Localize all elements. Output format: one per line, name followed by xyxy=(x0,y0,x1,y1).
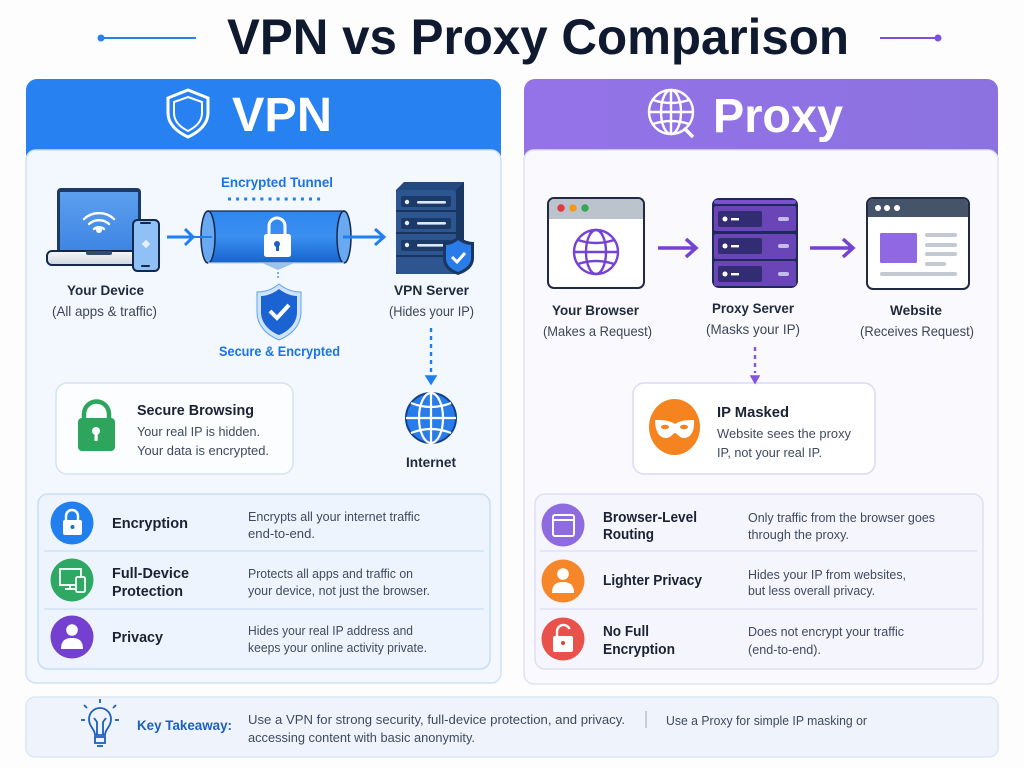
row: no full encryption xyxy=(603,623,904,658)
label: your browser: Your Browser xyxy=(552,302,640,318)
row: privacy: Hides your real IP address and xyxy=(248,623,413,638)
Proxy heading: Proxy xyxy=(713,90,843,143)
row: privacy: keeps your online activity private. xyxy=(248,640,427,655)
row: lighter privacy: Lighter Privacy xyxy=(603,572,703,589)
label: VPN server xyxy=(389,282,474,319)
icon: privacy xyxy=(50,616,94,658)
label: VPN server: VPN Server xyxy=(394,282,470,298)
features: Proxy xyxy=(535,494,983,669)
row: browser-level routing: through the proxy. xyxy=(748,527,849,542)
label: internet: Internet xyxy=(406,454,456,470)
row: lighter privacy: Hides your IP from websites, xyxy=(748,567,906,582)
VPN body xyxy=(26,150,501,683)
callout: secure browsing xyxy=(56,383,293,474)
icon: laptop xyxy=(47,188,141,265)
row: lighter privacy: but less overall privacy. xyxy=(748,583,875,598)
row: encryption: Encryption xyxy=(112,515,188,532)
label: website: Website xyxy=(890,302,942,318)
icon: VPN server xyxy=(396,182,464,274)
icon: no encryption xyxy=(542,618,584,660)
icon: website xyxy=(867,198,969,289)
row: encryption: end-to-end. xyxy=(248,526,315,541)
row: encryption: Encrypts all your internet traffic xyxy=(248,509,420,524)
row: full-device protection xyxy=(112,565,430,600)
icon: light bulb xyxy=(81,699,119,746)
row: no full encryption: (end-to-end). xyxy=(748,642,821,657)
icon: tunnel lock xyxy=(264,218,291,257)
row: no full encryption: Does not encrypt your traffic xyxy=(748,624,904,639)
icon: phone xyxy=(133,220,159,271)
label: your device: Your Device xyxy=(67,282,144,298)
row: privacy xyxy=(112,623,427,655)
callout: secure browsing: Secure Browsing xyxy=(137,402,254,419)
arrow: device to tunnel xyxy=(167,229,193,245)
icon: shield check xyxy=(257,284,301,340)
tunnel xyxy=(193,211,351,263)
arrow: server to internet xyxy=(426,328,436,384)
icon: shield xyxy=(168,90,208,137)
icon: proxy server xyxy=(712,198,798,288)
icon: lighter privacy xyxy=(542,560,584,602)
row: no full encryption: Encryption xyxy=(603,641,675,658)
icon: encryption xyxy=(50,502,94,544)
arrow: browser to proxy xyxy=(658,239,696,257)
key takeaway label: Key Takeaway: xyxy=(137,717,232,733)
label: VPN server: (Hides your IP) xyxy=(389,303,474,319)
icon: globe xyxy=(406,393,456,443)
label: secure and encrypted: Secure & Encrypted xyxy=(219,343,340,359)
icon: server shield xyxy=(443,236,474,275)
row: full-device protection: Protection xyxy=(112,583,183,600)
callout: IP masked: IP Masked xyxy=(717,404,789,421)
row: full-device protection: your device, not just the browser. xyxy=(248,583,430,598)
dotted line xyxy=(228,198,325,200)
title accent: left xyxy=(98,34,196,42)
row: browser-level routing xyxy=(603,509,935,543)
VPN heading: VPN xyxy=(232,89,332,142)
label: your device xyxy=(52,282,157,319)
label: encrypted tunnel: Encrypted Tunnel xyxy=(221,174,333,190)
features: VPN xyxy=(38,494,490,669)
row: browser-level routing: Browser-Level xyxy=(603,509,697,526)
row: privacy: Privacy xyxy=(112,629,164,646)
icon: globe search xyxy=(649,90,693,137)
panel: VPN xyxy=(26,79,501,683)
row: no full encryption: No Full xyxy=(603,623,649,640)
label: website: (Receives Request) xyxy=(860,323,974,339)
label: website xyxy=(860,302,974,339)
icon: devices xyxy=(50,558,94,602)
title accent: right xyxy=(880,34,942,42)
takeaway text: accessing content with basic anonymity. xyxy=(248,730,475,745)
row: lighter privacy xyxy=(603,567,906,598)
arrow: proxy to website xyxy=(810,239,853,257)
row: browser-level routing: Only traffic from the browser goes xyxy=(748,510,935,525)
label: your browser xyxy=(543,302,652,339)
row: encryption xyxy=(112,509,420,541)
title: VPN vs Proxy Comparison xyxy=(227,9,849,65)
callout: secure browsing: Your data is encrypted. xyxy=(137,443,269,458)
panel: Proxy xyxy=(524,79,998,684)
VPN header xyxy=(26,79,501,179)
takeaway text: Use a VPN for strong security, full-device protection, and privacy. xyxy=(248,712,625,727)
arrow: proxy to IP masked xyxy=(751,347,759,383)
icon: browser xyxy=(548,198,644,288)
label: proxy server: Proxy Server xyxy=(712,300,795,316)
icon: green lock xyxy=(78,402,115,451)
arrow: tunnel to server xyxy=(343,229,384,245)
callout: secure browsing: Your real IP is hidden. xyxy=(137,424,260,439)
label: proxy server xyxy=(706,300,800,337)
label: proxy server: (Masks your IP) xyxy=(706,321,800,337)
callout: IP masked xyxy=(633,383,875,474)
label: your browser: (Makes a Request) xyxy=(543,323,652,339)
takeaway text: Use a Proxy for simple IP masking or xyxy=(666,713,868,728)
row: browser-level routing: Routing xyxy=(603,526,654,543)
panel: key takeaway xyxy=(26,697,998,757)
icon: mask xyxy=(649,399,700,455)
Proxy body xyxy=(524,150,998,684)
label: your device: (All apps & traffic) xyxy=(52,303,157,319)
callout: IP masked: IP, not your real IP. xyxy=(717,445,822,460)
Proxy header xyxy=(524,79,998,179)
row: full-device protection: Full-Device xyxy=(112,565,189,582)
connector xyxy=(262,263,294,280)
icon: browser routing xyxy=(542,504,584,546)
takeaway text xyxy=(248,712,868,745)
callout: IP masked: Website sees the proxy xyxy=(717,426,851,441)
row: full-device protection: Protects all apps and traffic on xyxy=(248,566,413,581)
